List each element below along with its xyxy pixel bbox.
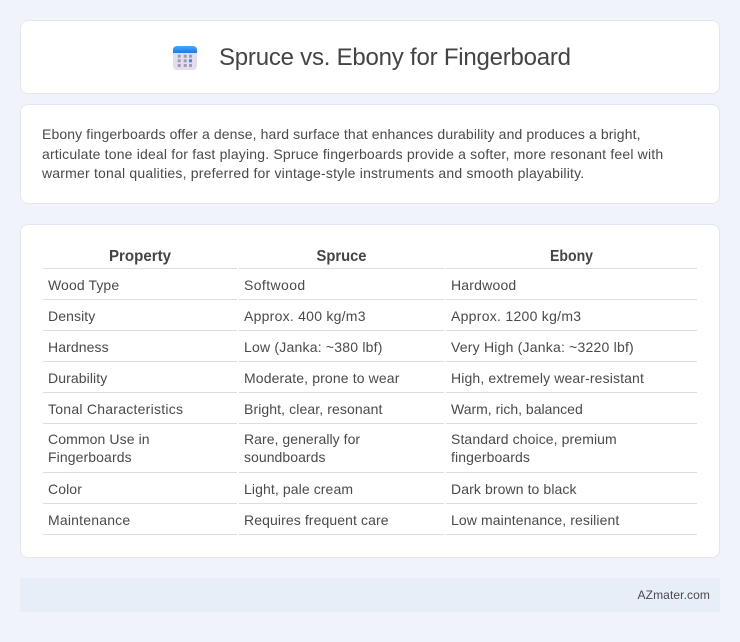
title: Spruce vs. Ebony for Fingerboard [219,44,571,71]
row: durability: High, extremely wear-resistant [451,370,644,386]
row: maintenance: Requires frequent care [244,512,389,528]
row: tonal characteristics: Tonal Characteristics [48,401,183,417]
row: color: Color [48,481,82,497]
footer bar [20,578,720,612]
row: wood type: Wood Type [48,277,119,293]
row: color: Light, pale cream [244,481,353,497]
row: wood type: Hardwood [451,277,516,293]
row: common use: Common Use in [48,431,150,447]
row: common use: Rare, generally for [244,431,360,447]
row: tonal characteristics: Warm, rich, balanced [451,401,583,417]
row: hardness [43,339,697,362]
row: tonal characteristics [43,401,697,424]
row: density [43,308,697,331]
footer credit: AZmater.com [638,588,710,602]
row: common use: soundboards [244,449,326,465]
row: wood type: Softwood [244,277,306,293]
row: durability [43,370,697,393]
row: common use: fingerboards [451,449,530,465]
icon: calendar [173,46,197,70]
panel: introduction [20,104,720,204]
row: wood type [43,277,697,300]
row: density: Approx. 400 kg/m3 [244,308,366,324]
row: hardness: Low (Janka: ~380 lbf) [244,339,383,355]
row: durability: Moderate, prone to wear [244,370,400,386]
row: durability: Durability [48,370,107,386]
row: common use [43,431,697,473]
row: tonal characteristics: Bright, clear, resonant [244,401,382,417]
row: density: Density [48,308,95,324]
text block: introduction: warmer tonal qualities, preferred for vintage-style instruments and smooth playability. [42,165,584,181]
table header: Spruce [316,248,367,265]
row: common use: Standard choice, premium [451,431,617,447]
row: hardness: Very High (Janka: ~3220 lbf) [451,339,634,355]
row: color: Dark brown to black [451,481,577,497]
row: hardness: Hardness [48,339,109,355]
panel: title card [20,20,720,94]
row: color [43,481,697,504]
row: maintenance [43,512,697,535]
row: density: Approx. 1200 kg/m3 [451,308,581,324]
table header [43,248,697,269]
table header: Ebony [550,248,593,265]
table header: Property [109,248,171,265]
row: common use: Fingerboards [48,449,132,465]
panel: comparison table [20,224,720,558]
text block: introduction: articulate tone ideal for fast playing. Spruce fingerboards provide a softer, more resonant feel with [42,146,663,162]
text block: introduction: Ebony fingerboards offer a dense, hard surface that enhances durability and produces a bright, [42,126,641,142]
row: maintenance: Maintenance [48,512,130,528]
row: maintenance: Low maintenance, resilient [451,512,619,528]
comparison table [43,248,697,535]
text block: introduction [42,126,663,181]
